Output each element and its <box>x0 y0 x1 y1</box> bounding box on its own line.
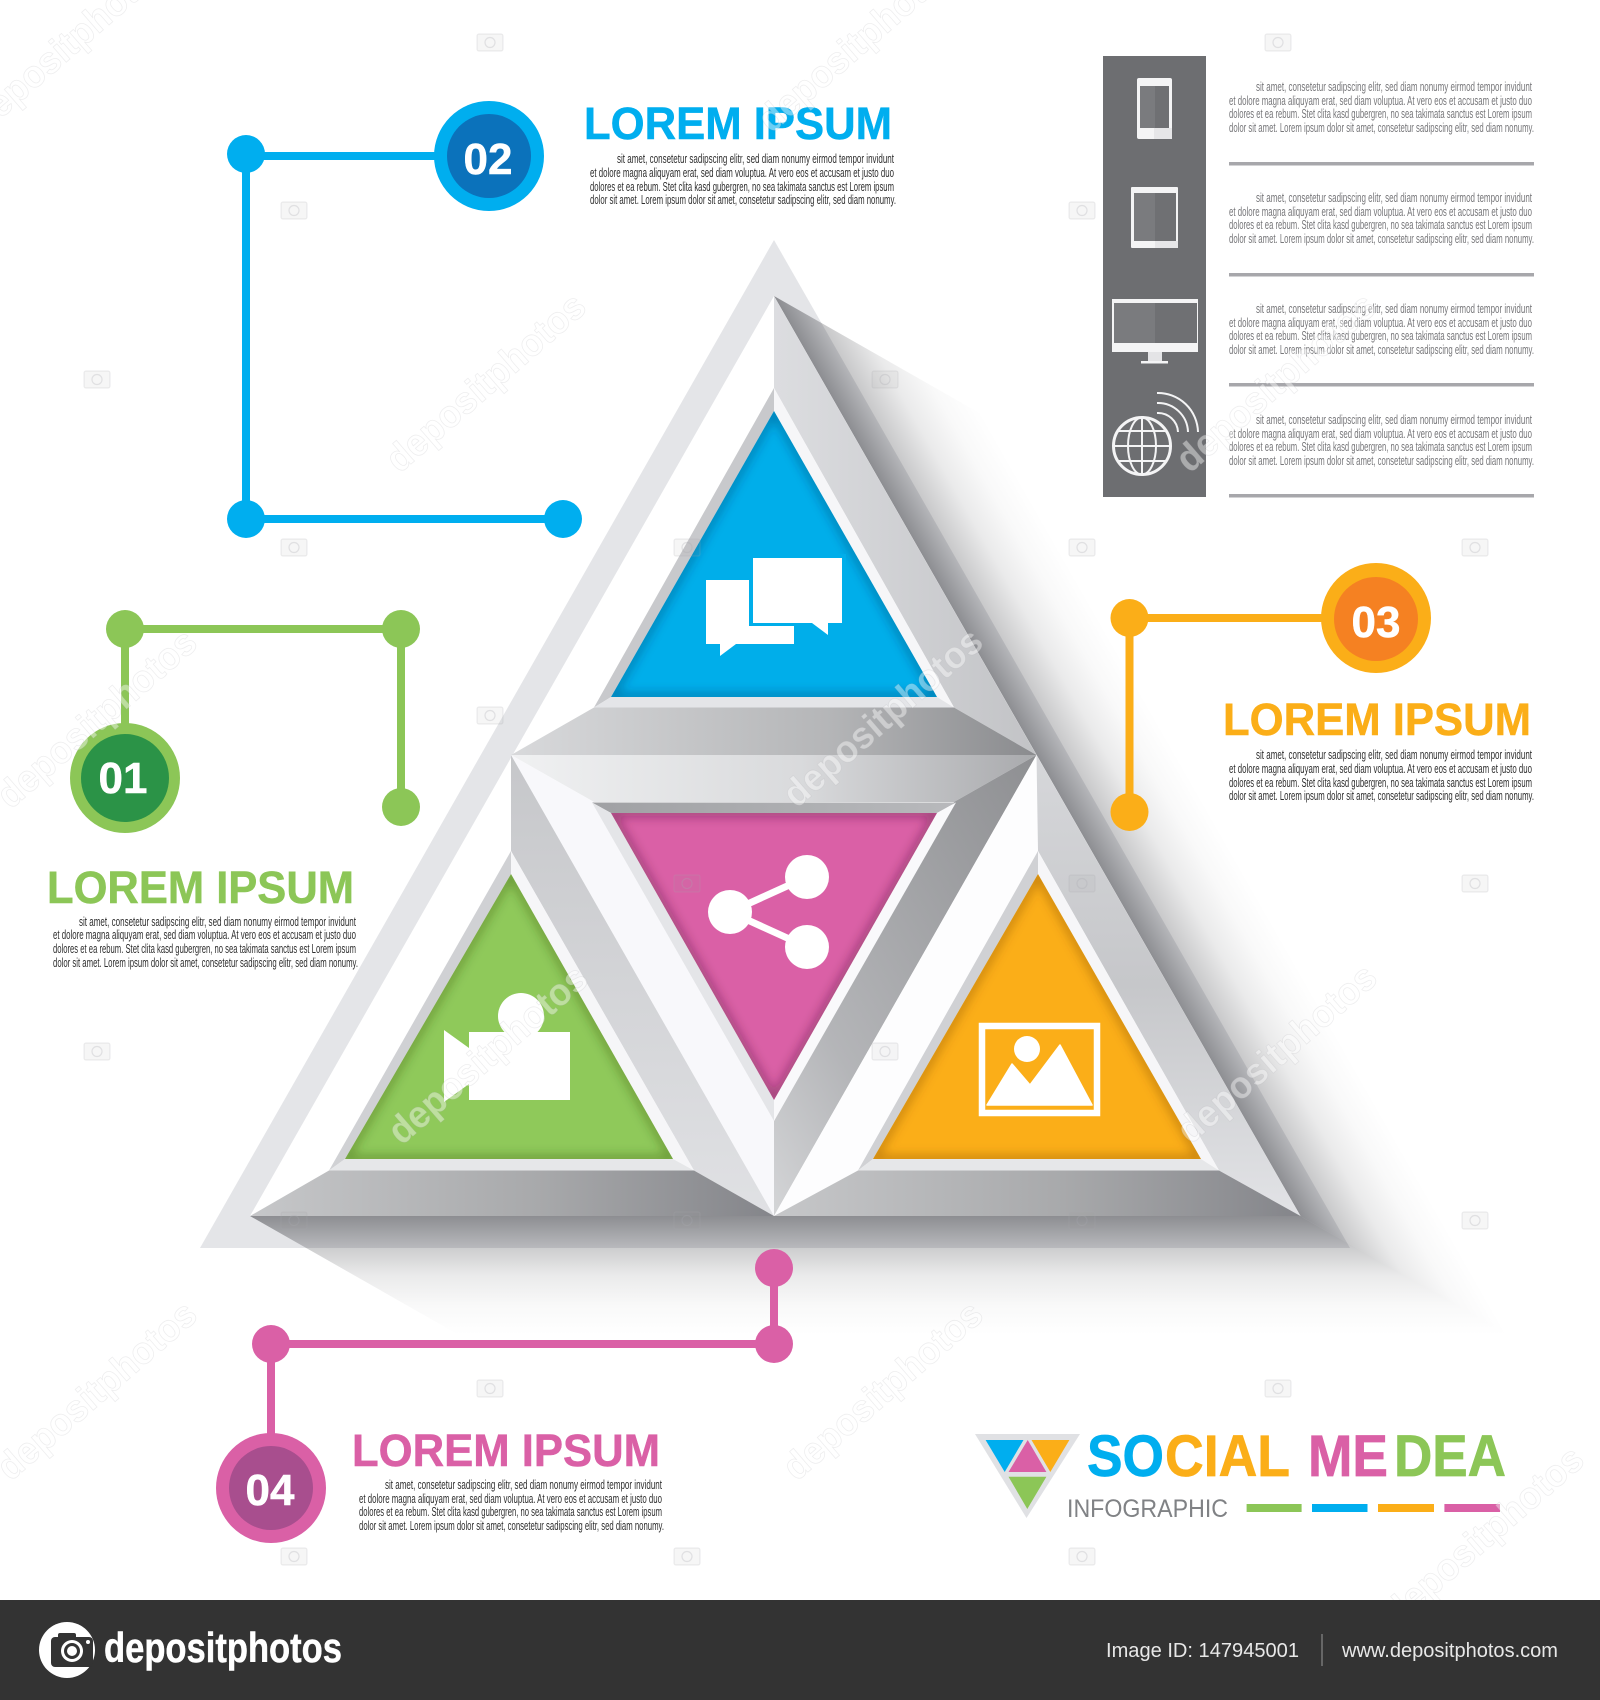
device text 4 <box>1229 412 1534 468</box>
icon: tablet <box>1131 187 1178 248</box>
text block 01: sit amet, consetetur sadipscing elitr, sed diam nonumy eirmod tempor invidunt <box>79 914 356 929</box>
green triangle with rim <box>329 851 694 1170</box>
right outer gray band <box>1036 755 1300 1216</box>
panel: device list <box>1103 56 1534 498</box>
left white band <box>511 755 774 1216</box>
connector 01 green <box>70 610 420 833</box>
pink triangle with rim <box>592 802 956 1121</box>
logo wordmark <box>1087 1424 1506 1489</box>
icon: globe with wifi arcs <box>1114 393 1198 475</box>
watermarks: depositphotos <box>1376 1438 1592 1634</box>
logo: social medea <box>975 1424 1506 1523</box>
connector 02 blue <box>227 101 582 538</box>
device text 1 <box>1229 79 1534 135</box>
text block 04: dolores et ea rebum. Stet clita kasd gubergren, no sea takimata sanctus est Lorem ipsum <box>359 1504 662 1519</box>
text block 04: LOREM IPSUM <box>352 1425 660 1476</box>
text block 02: et dolore magna aliquyam erat, sed diam voluptua. At vero eos et accusam et justo duo <box>590 165 894 180</box>
footer bar <box>0 1600 1600 1700</box>
logo subtitle: INFOGRAPHIC <box>1067 1495 1228 1523</box>
watermarks: depositphotos <box>775 620 991 816</box>
text block 03 <box>1223 694 1534 803</box>
text block 02: dolor sit amet. Lorem ipsum dolor sit amet, consetetur sadipscing elitr, sed diam nonumy. <box>590 192 896 207</box>
connector 04 pink: 04 <box>246 1466 295 1515</box>
right white band <box>774 755 1038 1216</box>
text block 01: et dolore magna aliquyam erat, sed diam voluptua. At vero eos et accusam et justo duo <box>53 927 356 942</box>
bottom right gray band <box>774 1170 1300 1216</box>
text block 04 <box>352 1425 664 1533</box>
icon: video camera <box>444 993 570 1102</box>
connector 03 orange <box>1110 563 1431 831</box>
icon: chat bubbles <box>706 554 846 656</box>
watermarks: depositphotos <box>1168 285 1384 481</box>
text block 02 <box>584 98 896 207</box>
logo colour dashes <box>1247 1504 1500 1512</box>
text block 01: dolor sit amet. Lorem ipsum dolor sit amet, consetetur sadipscing elitr, sed diam nonumy. <box>53 955 358 970</box>
text block 03: LOREM IPSUM <box>1223 694 1531 745</box>
left gray band <box>511 755 774 1216</box>
connector 03 orange: 03 <box>1352 598 1400 647</box>
band beneath blue triangle <box>511 708 1036 755</box>
inner white frame <box>250 296 1300 1216</box>
image id: Image ID: 147945001 <box>1106 1640 1299 1662</box>
text block 01 <box>47 862 358 970</box>
orange triangle with rim <box>858 851 1219 1170</box>
connector 01 green: 01 <box>99 754 147 803</box>
website: www.depositphotos.com <box>1341 1640 1558 1662</box>
logo wordmark: SO <box>1087 1424 1164 1489</box>
text block 01: dolores et ea rebum. Stet clita kasd gubergren, no sea takimata sanctus est Lorem ipsum <box>53 941 356 956</box>
icon: camera logo <box>39 1622 95 1678</box>
text block 04: sit amet, consetetur sadipscing elitr, sed diam nonumy eirmod tempor invidunt <box>385 1477 662 1492</box>
outer light triangle <box>200 240 1350 1248</box>
logo wordmark: ME <box>1308 1424 1388 1489</box>
icon: picture frame <box>982 1026 1097 1113</box>
icon: share <box>708 855 829 969</box>
right gray band <box>774 755 1036 1216</box>
bottom left gray band <box>250 1170 774 1216</box>
text block 02: sit amet, consetetur sadipscing elitr, sed diam nonumy eirmod tempor invidunt <box>617 151 894 166</box>
icon: smartphone <box>1137 78 1172 139</box>
device text 3 <box>1229 301 1534 357</box>
cast shadow <box>250 296 1509 1335</box>
text block 04: et dolore magna aliquyam erat, sed diam voluptua. At vero eos et accusam et justo duo <box>359 1491 662 1506</box>
text block 04: dolor sit amet. Lorem ipsum dolor sit amet, consetetur sadipscing elitr, sed diam nonumy. <box>359 1518 664 1533</box>
icon: logo triangles <box>975 1434 1080 1518</box>
device icon column <box>1103 56 1206 497</box>
brand name: depositphotos <box>104 1624 342 1671</box>
central triangle diagram <box>200 240 1509 1335</box>
connector 04 pink <box>216 1249 793 1543</box>
watermarks: depositphotos <box>380 957 596 1153</box>
watermarks: depositphotos <box>775 1293 991 1489</box>
connector 02 blue: 02 <box>464 135 512 184</box>
logo wordmark: CIAL <box>1165 1424 1290 1489</box>
blue triangle with rim <box>594 388 954 708</box>
text block 02: LOREM IPSUM <box>584 98 892 149</box>
device text 2 <box>1229 190 1534 246</box>
icon: monitor <box>1112 299 1198 364</box>
text block 01: LOREM IPSUM <box>47 862 354 913</box>
text block 02: dolores et ea rebum. Stet clita kasd gubergren, no sea takimata sanctus est Lorem ipsum <box>590 179 894 194</box>
band above pink triangle <box>511 755 1036 802</box>
watermarks: depositphotos <box>378 285 594 481</box>
upper right gray band <box>774 296 1036 755</box>
watermarks: depositphotos <box>1169 956 1385 1152</box>
logo wordmark: DEA <box>1394 1424 1506 1489</box>
